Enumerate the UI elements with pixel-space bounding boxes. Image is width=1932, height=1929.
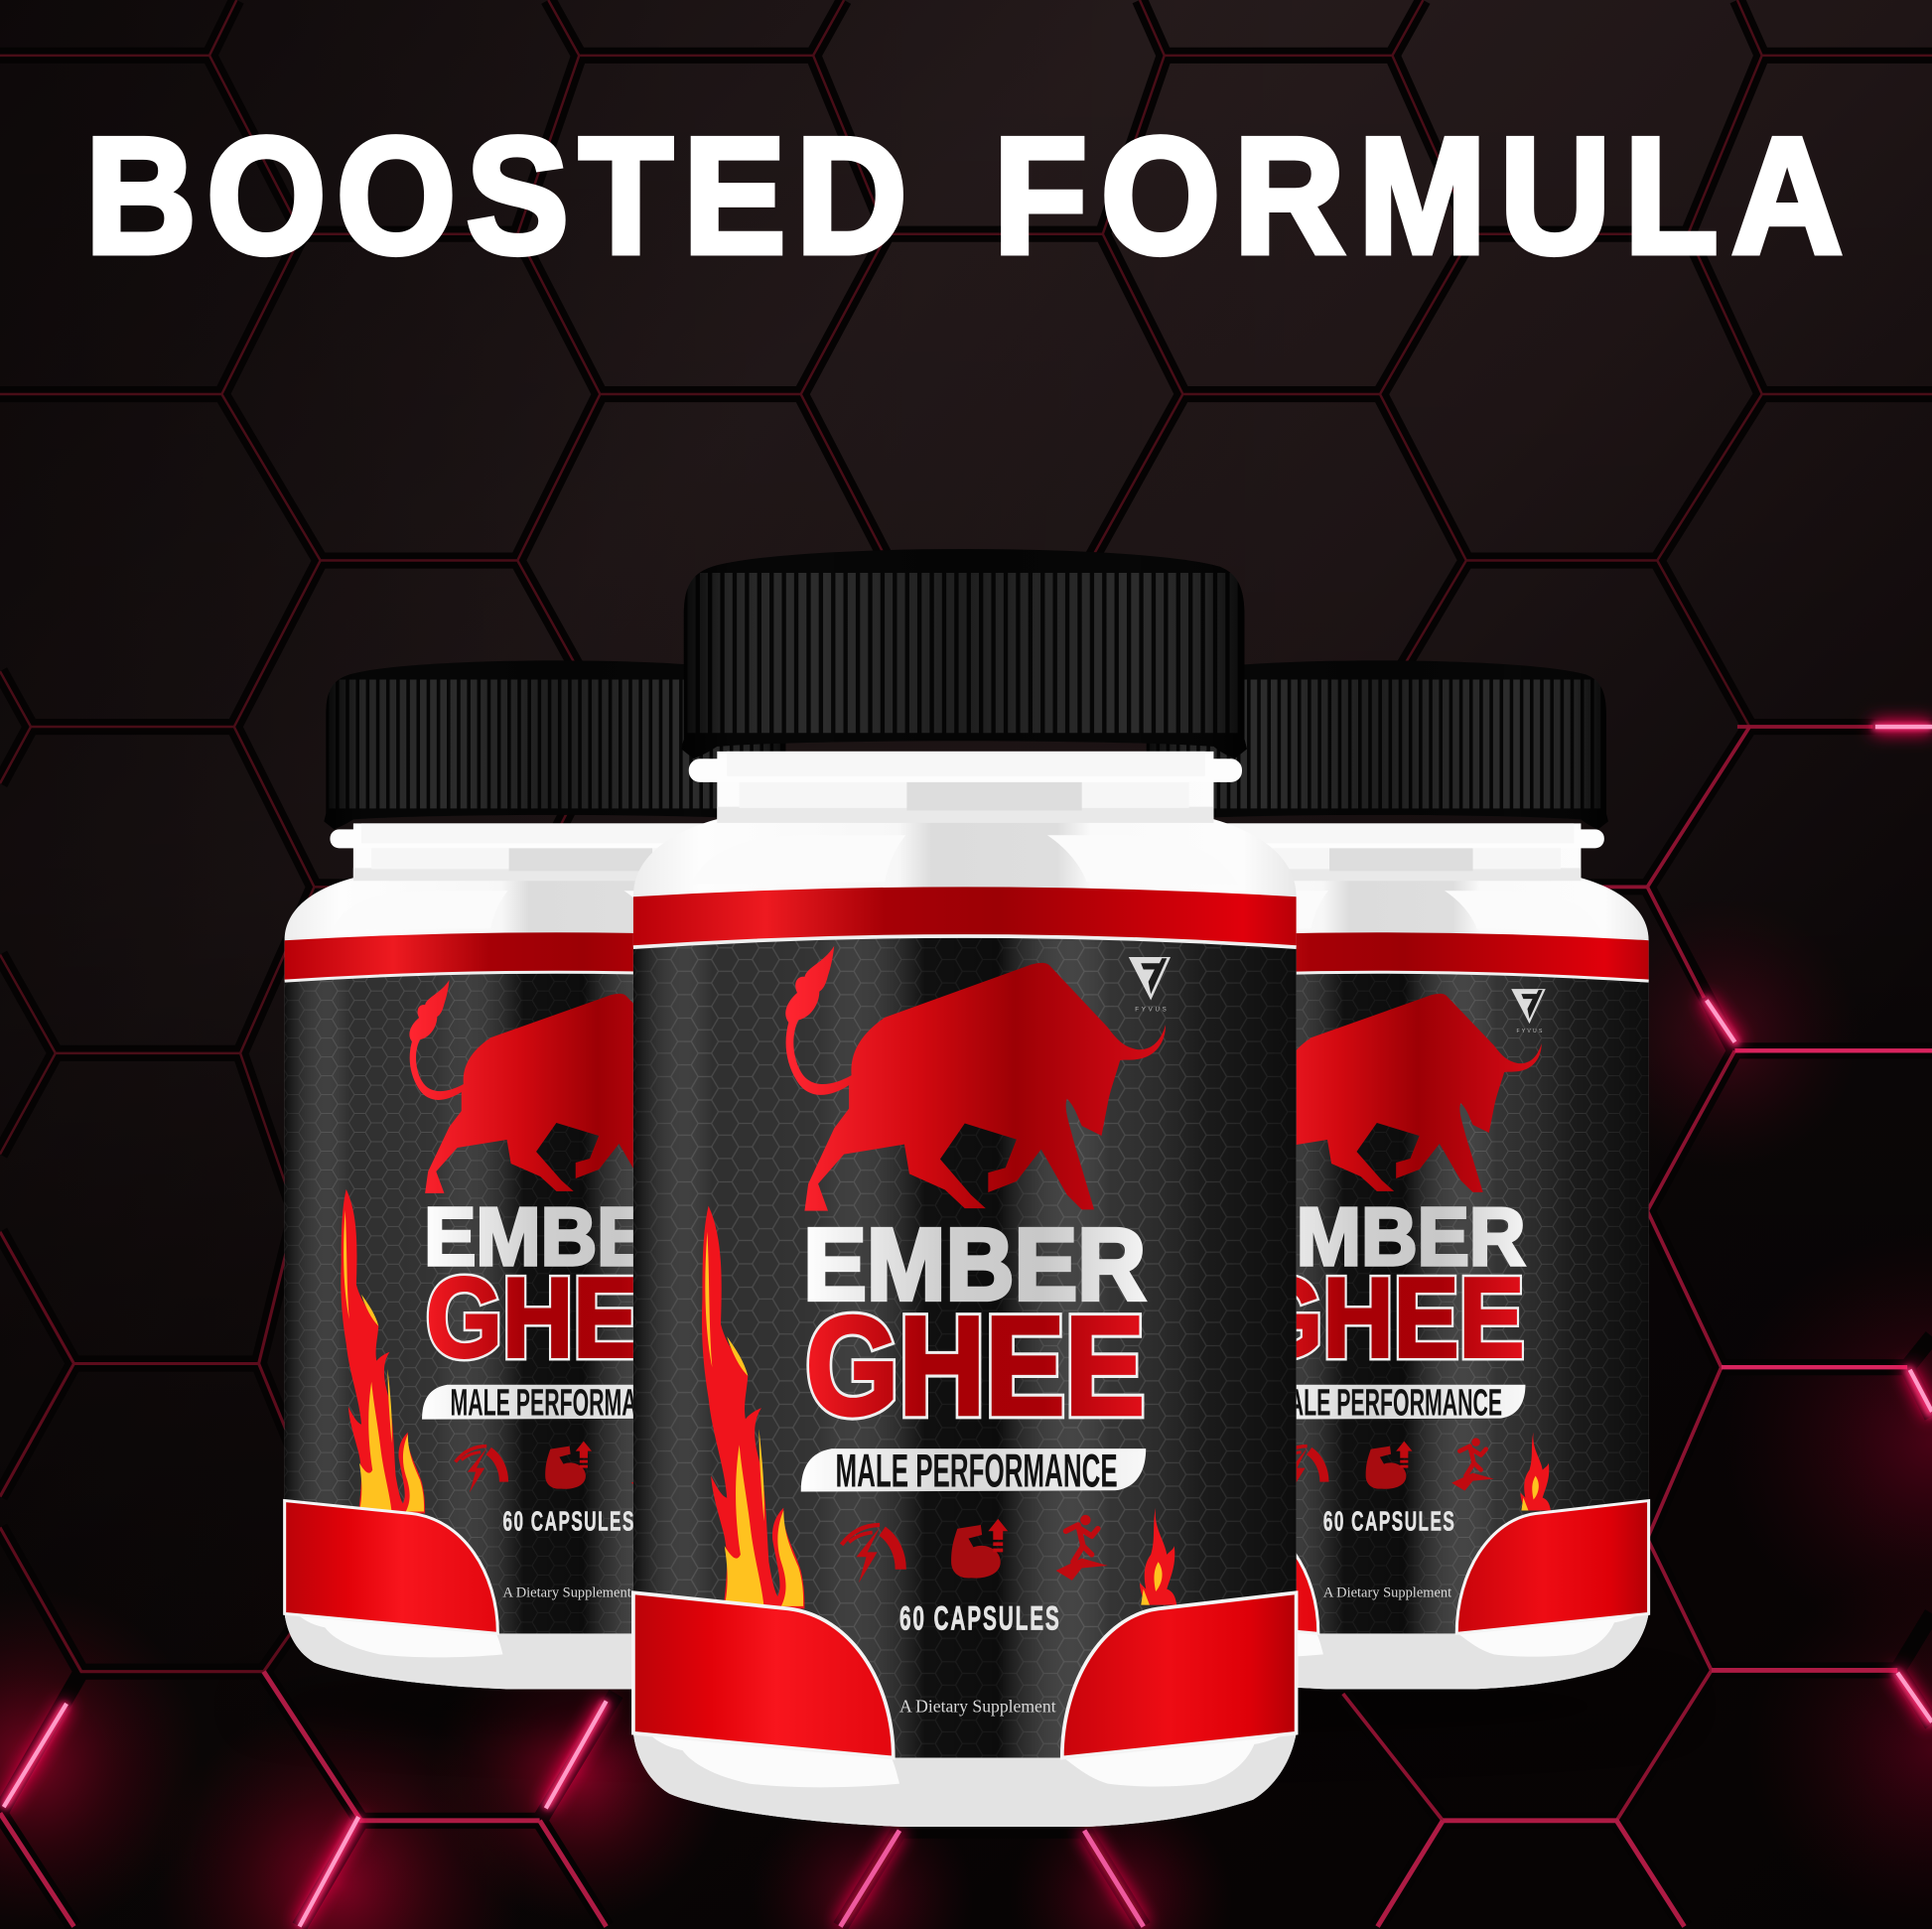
male performance pill <box>1242 1382 1525 1425</box>
GHEE wordmark: GHEE <box>806 1287 1145 1444</box>
right bottle <box>1105 655 1649 1689</box>
capsule count: 60 CAPSULES <box>502 1505 633 1537</box>
supplement note: A Dietary Supplement <box>502 1585 631 1600</box>
bull logo <box>785 946 1166 1211</box>
GHEE wordmark: GHEE <box>426 1256 704 1381</box>
red corner panels <box>1105 1501 1649 1633</box>
supplement note: A Dietary Supplement <box>1323 1585 1451 1600</box>
icons row <box>1276 1433 1551 1511</box>
male performance pill <box>801 1445 1146 1497</box>
GHEE wordmark: GHEE <box>1247 1256 1524 1381</box>
supplement note: A Dietary Supplement <box>899 1697 1056 1717</box>
icons row <box>456 1433 730 1511</box>
EMBER wordmark: EMBER <box>803 1207 1146 1321</box>
EMBER wordmark: EMBER <box>424 1190 705 1283</box>
bottle body, cap and label base <box>633 542 1297 1827</box>
title <box>85 104 1843 289</box>
bottle body, cap and label base <box>285 655 828 1689</box>
bottle body, cap and label base <box>1105 655 1649 1689</box>
red corner panels <box>633 1592 1297 1758</box>
capsule count: 60 CAPSULES <box>1323 1505 1454 1537</box>
male performance pill: MALE PERFORMANCE <box>1271 1382 1502 1425</box>
icons row <box>842 1508 1176 1605</box>
EMBER wordmark: EMBER <box>1245 1190 1525 1283</box>
brand mark <box>1129 957 1171 1014</box>
title: BOOSTED <box>85 104 907 289</box>
tall flame <box>1162 1189 1246 1514</box>
brand mark: FYVUS <box>1135 1007 1170 1014</box>
brand mark <box>1511 989 1546 1034</box>
GHEE wordmark: GHEE <box>1247 1256 1524 1381</box>
GHEE wordmark: GHEE <box>806 1287 1145 1444</box>
brand mark <box>691 989 725 1034</box>
male performance pill: MALE PERFORMANCE <box>451 1382 682 1425</box>
title: FORMULA <box>994 104 1843 289</box>
center bottle <box>633 542 1297 1827</box>
brand mark: FYVUS <box>1516 1029 1545 1034</box>
shadow behind bottles <box>250 1675 1680 1736</box>
brand mark: FYVUS <box>696 1029 724 1034</box>
left bottle <box>285 655 828 1689</box>
tall flame <box>702 1206 804 1608</box>
male performance pill <box>422 1382 705 1425</box>
GHEE wordmark: GHEE <box>426 1256 704 1381</box>
male performance pill: MALE PERFORMANCE <box>835 1445 1118 1497</box>
bull logo <box>1230 980 1542 1193</box>
capsule count: 60 CAPSULES <box>899 1599 1059 1638</box>
bull logo <box>409 980 721 1193</box>
tall flame <box>341 1189 425 1514</box>
red corner panels <box>285 1501 828 1633</box>
glowing pink edges <box>4 727 1932 1927</box>
